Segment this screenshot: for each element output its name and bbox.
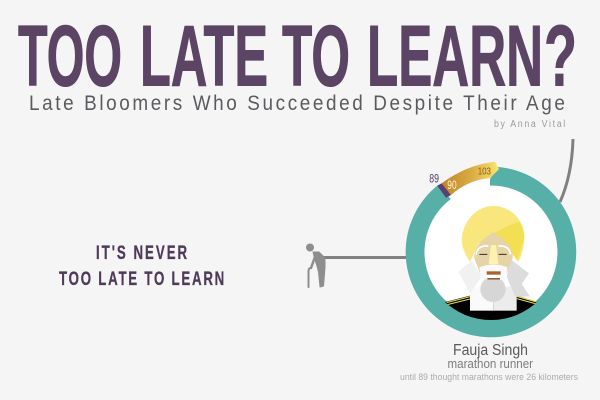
grey beard xyxy=(480,277,506,302)
person name: Fauja Singh xyxy=(453,342,528,359)
title: TOO xyxy=(18,8,122,104)
person note: until 89 thought marathons were 26 kilometers xyxy=(400,372,578,382)
title: LATE xyxy=(140,8,268,104)
tagline: IT'S NEVER xyxy=(96,241,187,264)
turban xyxy=(462,206,524,262)
collar xyxy=(458,261,482,293)
jacket xyxy=(445,296,538,320)
gold age arc 90 to 103 xyxy=(442,162,499,195)
tagline xyxy=(59,241,224,290)
shirt xyxy=(470,287,493,311)
connector line to walking figure xyxy=(323,256,407,259)
subtitle: Late Bloomers Who Succeeded Despite Their Age xyxy=(29,92,565,115)
title: TO xyxy=(282,8,350,104)
title: ? xyxy=(544,8,577,104)
portrait: Fauja Singh xyxy=(445,206,538,320)
eyes xyxy=(479,253,507,256)
face xyxy=(474,232,513,273)
white portrait disc xyxy=(424,185,558,319)
age label 89: 89 xyxy=(429,174,439,186)
teal ring xyxy=(406,167,576,337)
icon: elderly person with cane xyxy=(306,244,325,287)
age label 90: 90 xyxy=(447,180,457,192)
white beard xyxy=(479,264,507,283)
white patch under gold arc xyxy=(451,178,490,206)
person occupation: marathon runner xyxy=(448,357,533,371)
age label 103: 103 xyxy=(478,166,491,178)
byline: by Anna Vital xyxy=(494,117,565,129)
mouth xyxy=(487,271,501,280)
nose xyxy=(489,245,498,264)
panel: Fauja Singh timeline ring xyxy=(406,162,577,337)
purple age segment xyxy=(437,183,451,198)
tagline: TOO LATE TO LEARN xyxy=(59,267,224,290)
curved line to next item xyxy=(560,139,573,202)
eyebrows and hair xyxy=(476,246,511,255)
title xyxy=(18,8,577,104)
